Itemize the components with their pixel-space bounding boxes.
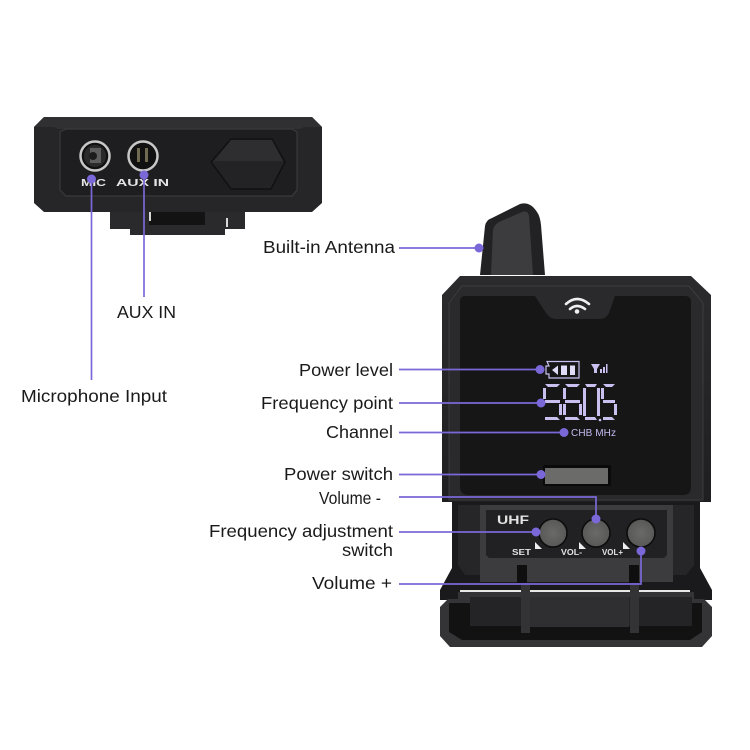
hexagonal switch	[211, 139, 285, 189]
digit 5	[543, 384, 562, 420]
channel and MHz label: CHB MHz	[571, 428, 616, 439]
callout: volume minus	[319, 488, 600, 524]
battery indicator	[546, 362, 579, 378]
signal indicator	[591, 364, 608, 373]
callout: frequency adjustment switch: Frequency adjustment	[209, 521, 393, 541]
microphone jack	[80, 142, 110, 170]
jack panel	[60, 129, 297, 196]
callout: frequency adjustment switch	[209, 521, 540, 560]
top view device	[34, 117, 322, 235]
callout: power switch	[284, 464, 546, 484]
callout: volume minus: Volume -	[319, 488, 381, 508]
icon: wifi	[566, 299, 589, 313]
callout: built-in antenna: Built-in Antenna	[263, 237, 395, 257]
front view device	[440, 203, 712, 647]
aux jack	[128, 142, 158, 170]
VOL- button: VOL-	[561, 547, 582, 557]
callout: channel: Channel	[326, 422, 393, 442]
jack labels	[81, 177, 169, 189]
callout: frequency adjustment switch: switch	[342, 540, 393, 560]
VOL- button	[561, 519, 610, 557]
callout: power level	[299, 360, 544, 380]
slots	[517, 565, 639, 583]
main housing	[442, 276, 711, 502]
lower hinge frame	[440, 500, 712, 600]
antenna	[480, 203, 545, 275]
frequency digits	[543, 384, 617, 421]
digit 0	[583, 384, 600, 420]
battery tray	[440, 583, 712, 647]
control panel	[480, 505, 673, 583]
power switch	[543, 465, 611, 486]
jack labels: MIC	[81, 177, 107, 189]
SET button	[512, 519, 567, 557]
UHF label: UHF	[497, 513, 529, 527]
callout: channel	[326, 422, 568, 442]
callout: AUX IN	[117, 170, 176, 322]
callout: volume plus	[312, 546, 646, 593]
callout: microphone input	[21, 174, 167, 406]
digit 6	[563, 384, 582, 420]
device clip	[110, 212, 245, 235]
callout: power switch: Power switch	[284, 464, 393, 484]
SET button: SET	[512, 547, 532, 557]
callout: frequency point	[261, 393, 546, 413]
VOL+ button: VOL+	[602, 547, 623, 557]
callout: AUX IN: AUX IN	[117, 302, 176, 322]
jack labels: AUX IN	[116, 177, 169, 189]
callout: power level: Power level	[299, 360, 393, 380]
callout: built-in antenna	[263, 237, 484, 257]
screen	[460, 296, 691, 495]
callout: frequency point: Frequency point	[261, 393, 393, 413]
VOL+ button	[602, 519, 655, 557]
callout: volume plus: Volume +	[312, 573, 392, 593]
device housing	[34, 117, 322, 212]
digit 5	[601, 384, 617, 420]
callout: microphone input: Microphone Input	[21, 386, 167, 406]
